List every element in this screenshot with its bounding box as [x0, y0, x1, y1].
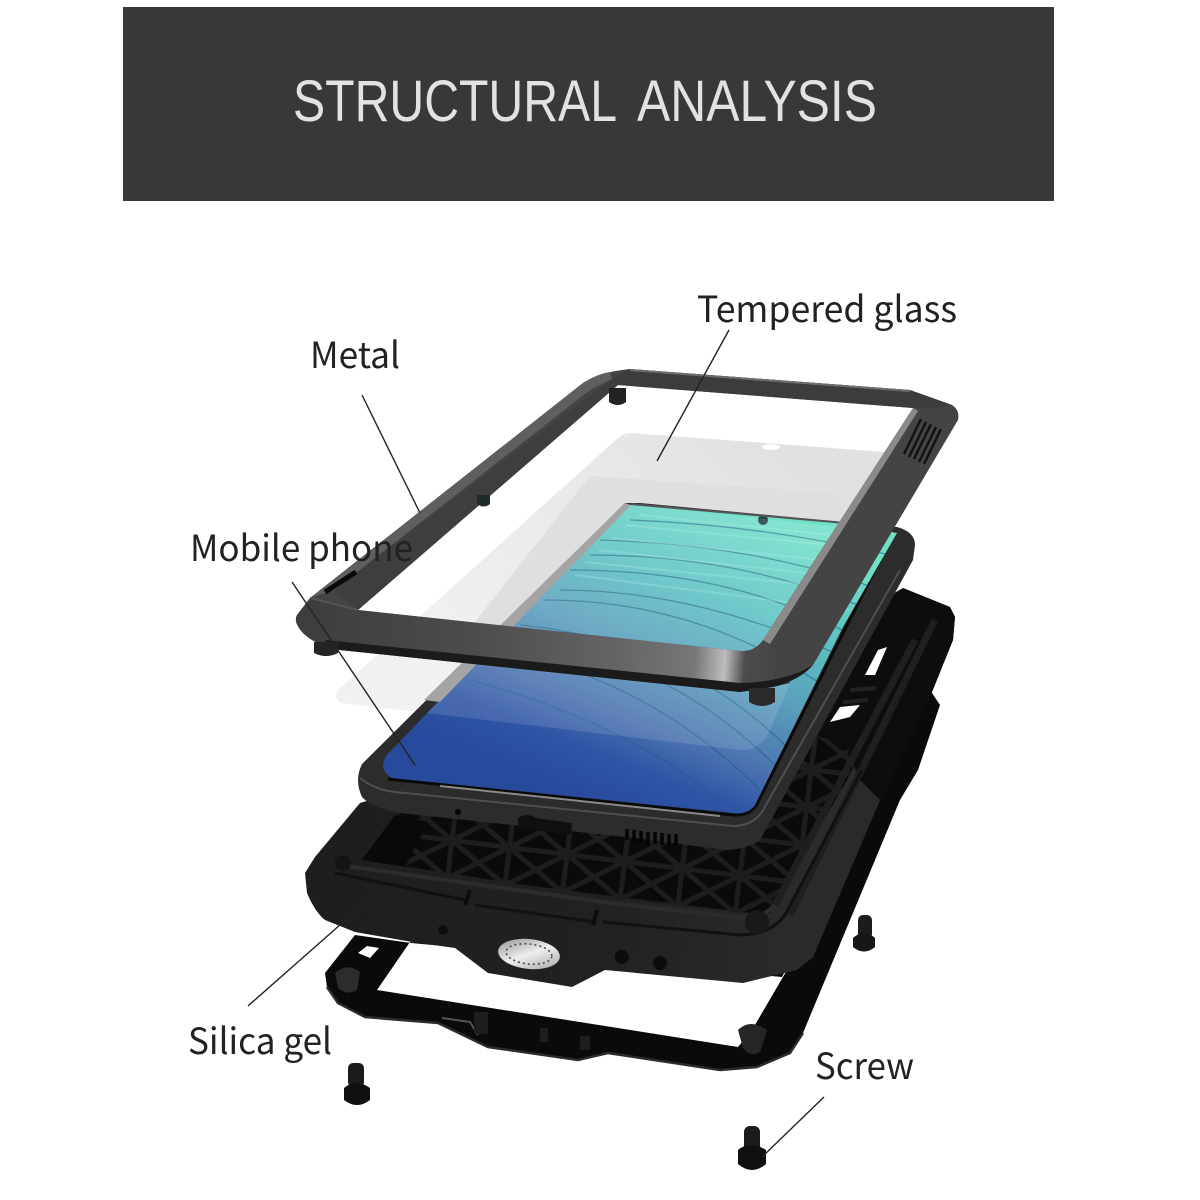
frame post: left mid — [477, 495, 490, 506]
leader line: metal — [362, 395, 420, 513]
leader line: screw — [762, 1097, 824, 1157]
label: silica gel: Silica gel — [188, 1013, 332, 1065]
frame front band — [296, 598, 790, 692]
frame vent grille — [904, 419, 941, 464]
silica gel case — [305, 588, 955, 987]
screw: bottom right — [738, 1126, 766, 1170]
frame right band highlight — [763, 408, 918, 644]
screw: right — [853, 915, 875, 952]
frame post: back left — [609, 388, 626, 405]
tempered glass sheet — [336, 433, 888, 750]
leader line: tempered glass — [657, 330, 729, 461]
phone screen — [370, 500, 910, 820]
label: screw: Screw — [815, 1038, 914, 1090]
label: tempered glass: Tempered glass — [697, 281, 957, 333]
label: metal: Metal — [310, 327, 400, 379]
structural analysis infographic — [123, 7, 1054, 1170]
frame post: front left — [314, 642, 338, 656]
leader line: mobile phone — [292, 582, 415, 765]
case interior mesh — [362, 610, 905, 913]
glass overlay on screen — [424, 503, 839, 750]
speaker port — [497, 936, 561, 972]
mobile phone — [358, 500, 915, 850]
title word: structural: STRUCTURAL — [293, 69, 617, 134]
frame top band — [612, 369, 952, 408]
leader line: silica gel — [248, 902, 366, 1006]
title word: analysis: ANALYSIS — [637, 69, 877, 134]
frame left bevel — [310, 372, 612, 598]
back metal frame — [325, 690, 940, 1070]
header banner — [123, 7, 1054, 201]
label: mobile phone: Mobile phone — [190, 520, 413, 572]
case right rail area — [815, 588, 955, 800]
frame post: front right — [749, 688, 775, 706]
screw: left — [344, 1063, 370, 1105]
metal frame — [296, 369, 958, 706]
